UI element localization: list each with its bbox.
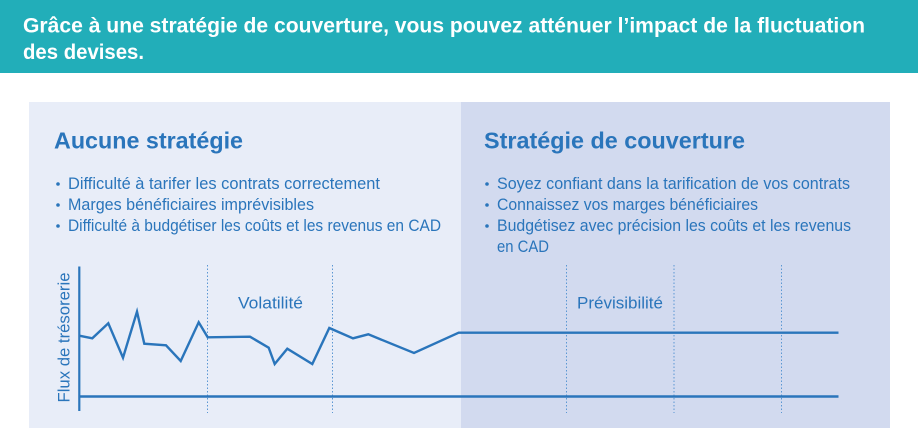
bullet list: aucune stratégie (56, 174, 441, 235)
chart: cash flow over time (54, 265, 838, 413)
header banner: des devises. (23, 41, 144, 64)
bullet list: aucune stratégie: Difficulté à tarifer les contrats correctement (68, 174, 380, 193)
bullet list: stratégie de couverture: Soyez confiant dans la tarification de vos contrats (497, 174, 850, 193)
bullet list: stratégie de couverture: Connaissez vos marges bénéficiaires (497, 195, 758, 214)
bullet list: aucune stratégie: Marges bénéficiaires imprévisibles (68, 195, 314, 214)
dotted period dividers (208, 265, 782, 413)
panel: aucune stratégie (29, 102, 461, 428)
y axis (78, 266, 80, 411)
y axis label: Flux de trésorerie (54, 272, 74, 402)
bullet list: stratégie de couverture: Budgétisez avec précision les coûts et les revenus (497, 216, 851, 235)
bullet list: stratégie de couverture: en CAD (497, 237, 549, 256)
panel: stratégie de couverture (461, 102, 890, 428)
header banner: Grâce à une stratégie de couverture, vous pouvez atténuer l’impact de la fluctuation (23, 14, 865, 37)
bullet list: stratégie de couverture (485, 174, 851, 256)
cash flow line (79, 312, 839, 364)
label: prévisibilité: Prévisibilité (577, 293, 663, 312)
bullet list: aucune stratégie: Difficulté à budgétiser les coûts et les revenus en CAD (68, 216, 441, 235)
heading: aucune stratégie: Aucune stratégie (54, 127, 243, 153)
label: volatilité: Volatilité (238, 293, 303, 312)
header banner (0, 0, 918, 73)
heading: stratégie de couverture: Stratégie de couverture (484, 127, 745, 153)
x axis (79, 395, 838, 398)
